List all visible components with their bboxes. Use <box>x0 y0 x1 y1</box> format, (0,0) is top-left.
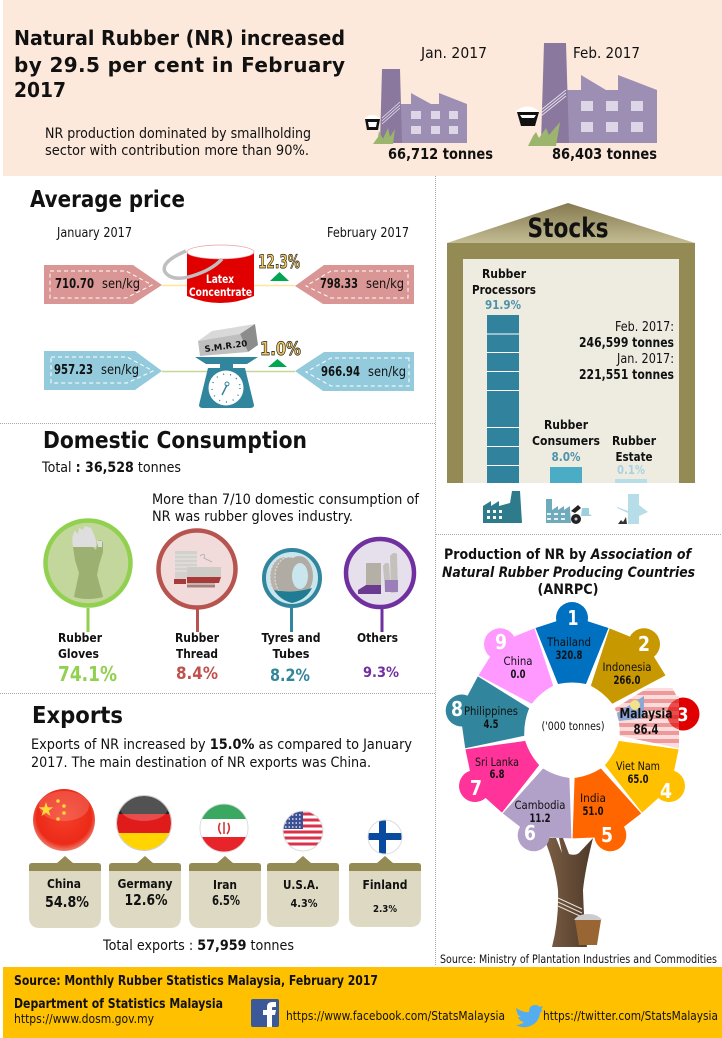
change: SMR20 1.0%: 1.0% <box>260 338 301 360</box>
petal: Philippines <box>440 672 533 758</box>
petal: Malaysia: Malaysia <box>620 707 672 722</box>
department <box>14 997 223 1026</box>
label: January output: Jan. 2017 <box>420 44 487 62</box>
petal: Malaysia: 86.4 <box>634 723 658 738</box>
card: USA: U.S.A. <box>283 877 319 892</box>
label: others: Others <box>357 630 398 645</box>
price tag: SMR20 January <box>44 351 162 390</box>
title <box>14 26 345 102</box>
panel: header <box>3 0 722 176</box>
bar: rubber estate: Rubber <box>612 433 657 448</box>
link: facebook: https://www.facebook.com/StatsMalaysia <box>286 1009 505 1023</box>
icon: latex bucket: Concentrate <box>189 285 252 299</box>
label: tyres and tubes: Tyres and <box>262 630 320 645</box>
heading: ANRPC <box>442 547 695 598</box>
label: unit: ('000 tonnes) <box>542 719 604 733</box>
text block: stock totals: Jan. 2017: <box>616 352 674 367</box>
text block: exports note: Exports of NR increased by 15.0% as compared to January <box>31 737 412 753</box>
price tag: SMR20 January: 957.23 <box>54 363 93 378</box>
bar: rubber consumers: Rubber <box>544 417 589 432</box>
text block: stock totals: 221,551 tonnes <box>579 368 674 383</box>
label: tyres and tubes: 8.2% <box>270 666 310 686</box>
icon: tyres and tubes <box>264 550 320 632</box>
petal: Sri Lanka: 7 <box>470 776 482 800</box>
panel: exports <box>29 703 421 954</box>
heading: stocks: Stocks <box>528 213 608 244</box>
panel: domestic consumption <box>41 428 420 686</box>
price tag: SMR20 February: sen/kg <box>368 365 406 380</box>
petal: Indonesia: Indonesia <box>602 660 652 674</box>
icon: China flag <box>33 789 95 851</box>
icon: Germany flag <box>116 795 172 852</box>
icon: latex bucket: Latex <box>206 272 234 286</box>
panel: average price <box>30 187 414 408</box>
petal: Thailand: 320.8 <box>556 648 582 662</box>
card: Germany <box>109 856 181 928</box>
card: Germany: 12.6% <box>124 891 168 909</box>
petal: Cambodia: Cambodia <box>514 798 566 812</box>
card: China: 54.8% <box>45 893 89 911</box>
icon: others boots and rolls <box>346 539 414 632</box>
bar: rubber consumers <box>532 417 600 483</box>
icon: estate tree and cup <box>617 494 648 524</box>
petal: India: 5 <box>601 823 613 847</box>
heading: ANRPC: (ANRPC) <box>538 582 598 598</box>
text block: gloves note <box>152 492 420 525</box>
card: China: China <box>47 876 81 891</box>
label: rubber thread: Thread <box>176 646 218 661</box>
petal: Cambodia: 11.2 <box>530 811 550 825</box>
text block: smallholding note: sector with contribution more than 90%. <box>45 143 309 159</box>
bar: rubber processors: Rubber <box>482 266 527 281</box>
card: Finland <box>349 856 421 927</box>
panel: ANRPC production tree <box>440 547 717 966</box>
label: January output <box>388 44 493 163</box>
petal: Thailand: 1 <box>568 606 578 630</box>
text block: stock totals: 246,599 tonnes <box>579 336 674 351</box>
bar: rubber estate <box>612 433 657 483</box>
panel: footer <box>3 967 722 1038</box>
heading: exports: Exports <box>32 703 123 729</box>
label: February output: Feb. 2017 <box>573 44 640 62</box>
label: rubber gloves: Rubber <box>58 630 103 645</box>
icon: latex bucket <box>164 245 254 303</box>
icon: latex cup <box>574 914 602 945</box>
title: 2017 <box>14 78 66 102</box>
text block: exports note: 2017. The main destination of NR exports was China. <box>31 755 371 771</box>
walls <box>447 243 695 483</box>
heading: ANRPC: Natural Rubber Producing Countries <box>442 565 695 581</box>
card: Iran: 6.5% <box>212 894 240 909</box>
text block: gloves note: NR was rubber gloves industry. <box>152 509 353 525</box>
petal: Indonesia: 266.0 <box>614 673 640 687</box>
bar: rubber estate: Estate <box>616 449 652 464</box>
petal: Viet Nam: 65.0 <box>628 772 648 786</box>
petal: Philippines: 8 <box>451 697 463 721</box>
petal: India: 51.0 <box>582 804 604 818</box>
icon: twitter <box>516 1005 543 1027</box>
petal: Philippines: 4.5 <box>484 717 498 731</box>
card: China <box>29 856 101 928</box>
text block: stock totals: Feb. 2017: <box>615 320 674 335</box>
text block: stock totals <box>579 320 674 383</box>
price tag: latex January <box>44 265 162 304</box>
bar: rubber estate: 0.1% <box>617 462 645 477</box>
petal: Sri Lanka: Sri Lanka <box>475 755 519 769</box>
bar: rubber processors: 91.9% <box>485 297 521 312</box>
price tag: SMR20 February: 966.94 <box>321 365 360 380</box>
petal: Philippines: Philippines <box>464 704 518 718</box>
label: rubber thread: 8.4% <box>176 664 218 684</box>
price tag: SMR20 January: sen/kg <box>101 363 139 378</box>
petal: Sri Lanka: 6.8 <box>490 767 504 781</box>
icon: tapping cut <box>558 898 582 916</box>
icon: January factory <box>365 69 467 144</box>
petal: India: India <box>580 791 606 805</box>
price tag: SMR20 February <box>295 352 414 391</box>
icon: February factory <box>516 43 657 146</box>
text block: smallholding note <box>45 126 311 159</box>
heading: domestic consumption: Domestic Consumption <box>43 428 307 454</box>
icon: rubber gloves <box>46 520 130 632</box>
price tag: latex February: sen/kg <box>366 277 404 292</box>
card: USA <box>267 856 339 927</box>
petal: China: China <box>504 654 532 668</box>
petal: Viet Nam: 4 <box>660 779 672 803</box>
heading: ANRPC: Production of NR by Association of <box>444 547 693 563</box>
label: rubber gloves <box>58 630 117 686</box>
title: Natural Rubber (NR) increased <box>14 26 345 50</box>
roof <box>447 203 695 243</box>
text block: total exports: Total exports : 57,959 tonnes <box>102 938 294 954</box>
card: Finland: Finland <box>362 877 408 892</box>
icon: Iran flag <box>200 804 248 853</box>
label: January output: 66,712 tonnes <box>388 145 493 163</box>
petal: Malaysia <box>615 688 700 750</box>
icon: processor factory <box>483 491 522 523</box>
label: tyres and tubes: Tubes <box>272 646 310 661</box>
petal: India <box>553 761 650 863</box>
source line: Source: Monthly Rubber Statistics Malaysia, February 2017 <box>14 974 378 989</box>
label: February output <box>552 44 657 163</box>
card: Germany: Germany <box>118 876 172 891</box>
icon: Finland flag <box>368 820 402 854</box>
bar: rubber consumers: 8.0% <box>552 449 581 464</box>
card: USA: 4.3% <box>290 897 318 910</box>
petal: China <box>462 608 570 718</box>
label: rubber thread: Rubber <box>175 630 220 645</box>
department: https://www.dosm.gov.my <box>14 1012 154 1026</box>
icon: USA flag <box>283 811 323 851</box>
price tag: latex January: sen/kg <box>102 277 140 292</box>
department: Department of Statistics Malaysia <box>14 997 223 1012</box>
petal: Indonesia <box>574 608 682 718</box>
heading: average price: Average price <box>30 187 185 213</box>
text block: total: Total : 36,528 tonnes <box>41 460 181 476</box>
petal: China: 9 <box>495 630 507 654</box>
icon: consumer factory <box>546 499 592 524</box>
label: February output: 86,403 tonnes <box>552 145 657 163</box>
card: Iran: Iran <box>213 877 237 892</box>
petal: Viet Nam <box>594 721 701 826</box>
change: SMR20 1.0% <box>260 338 301 367</box>
petal: Malaysia: 3 <box>678 704 688 726</box>
label: rubber gloves: Gloves <box>58 646 99 661</box>
card: Iran <box>189 856 261 928</box>
price tag: latex January: 710.70 <box>55 277 94 292</box>
icon: weighing scale with SMR block <box>195 324 258 408</box>
label: January column: January 2017 <box>56 226 132 241</box>
bar: rubber processors <box>472 266 536 483</box>
petal: Indonesia: 2 <box>638 632 650 656</box>
text block: gloves note: More than 7/10 domestic consumption of <box>152 492 420 508</box>
price tag: latex February <box>295 265 414 304</box>
petal: Sri Lanka <box>443 721 550 826</box>
label: February column: February 2017 <box>327 226 409 241</box>
petal: Viet Nam: Viet Nam <box>616 759 660 773</box>
text block: exports note <box>31 737 412 771</box>
price tag: latex February: 798.33 <box>320 277 358 292</box>
panel: stocks warehouse <box>447 203 695 524</box>
icon: tree trunk <box>544 838 593 947</box>
petal: Cambodia: 6 <box>524 821 536 845</box>
card: Finland: 2.3% <box>373 904 397 915</box>
change: latex 12.3% <box>258 251 300 281</box>
petal: Thailand: Thailand <box>546 635 591 649</box>
change: latex 12.3%: 12.3% <box>258 251 300 273</box>
petal: Cambodia <box>494 761 591 863</box>
icon: facebook <box>251 999 279 1027</box>
label: rubber gloves: 74.1% <box>58 662 117 686</box>
petal: China: 0.0 <box>510 667 526 681</box>
icon: weighing scale with SMR block: S.M.R.20 <box>204 339 248 355</box>
bar: rubber processors: Processors <box>472 282 536 297</box>
text block: smallholding note: NR production dominated by smallholding <box>45 126 311 142</box>
label: others <box>357 630 399 681</box>
label: others: 9.3% <box>363 665 399 681</box>
petal: Thailand <box>536 602 608 684</box>
bar: rubber consumers: Consumers <box>532 433 600 448</box>
label: tyres and tubes <box>262 630 320 686</box>
icon: rubber thread <box>158 530 236 632</box>
label: rubber thread <box>175 630 220 684</box>
title: by 29.5 per cent in February <box>14 53 345 77</box>
